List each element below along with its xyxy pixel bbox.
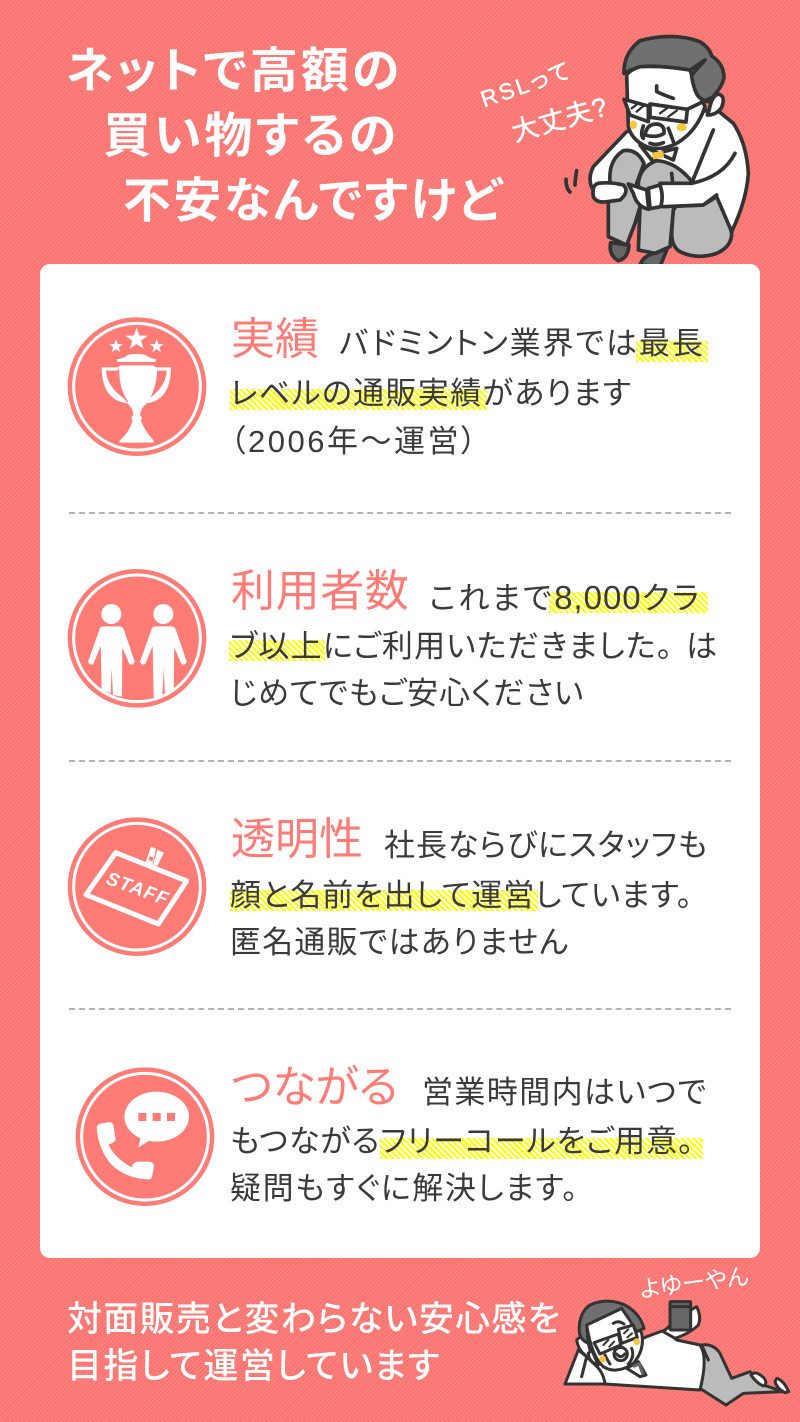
heading: 実績	[231, 315, 319, 364]
item: つながる: 疑問もすぐに解決します。	[230, 1171, 579, 1206]
item: 利用者数: ブ以上にご利用いただきました。は	[230, 629, 718, 664]
speech text: RSLって大丈夫?	[477, 56, 612, 147]
footer message: 対面販売と変わらない安心感を	[67, 1300, 561, 1339]
highlights	[636, 341, 708, 362]
item: 利用者数: じめてでもご安心ください	[230, 676, 584, 711]
icon: trophy	[68, 317, 206, 456]
body text: バドミントン業界では最長	[339, 326, 705, 361]
item: つながる	[76, 1063, 708, 1206]
illustration: worried man hugging knees	[477, 34, 750, 264]
item: 実績: レベルの通販実績があります	[230, 376, 632, 411]
dividers	[69, 512, 731, 514]
icon: staff badge	[68, 817, 206, 956]
title: 買い物するの	[103, 110, 399, 163]
item: 実績: （2006年～運営）	[230, 424, 479, 459]
highlights	[549, 592, 708, 613]
item: 透明性: 顔と名前を出して運営しています。	[230, 878, 693, 913]
speech text: RSLって大丈夫?: RSLって	[477, 56, 576, 112]
heading: つながる	[231, 1063, 398, 1112]
panel: white card	[40, 264, 760, 1258]
title: 不安なんですけど	[123, 175, 504, 228]
title	[66, 45, 504, 228]
item: つながる: もつながるフリーコールをご用意。	[230, 1124, 694, 1159]
body text: これまで8,000クラ	[429, 579, 701, 616]
heading: 透明性	[231, 815, 363, 864]
footer message	[67, 1300, 561, 1386]
highlight	[230, 890, 538, 911]
body text: 社長ならびにスタッフも	[384, 828, 708, 863]
icon: staff badge: STAFF	[104, 867, 172, 909]
speech text: よゆーやん: よゆーやん	[638, 1263, 750, 1302]
speech text: RSLって大丈夫?: 大丈夫?	[508, 91, 612, 147]
item: 透明性: 匿名通販ではありません	[230, 925, 569, 960]
title: ネットで高額の	[66, 45, 402, 98]
body text: 営業時間内はいつで	[422, 1075, 708, 1110]
illustration: relaxed man lying down with phone	[564, 1263, 790, 1406]
heading: 利用者数	[231, 567, 409, 616]
highlight	[380, 1138, 703, 1159]
icon: phone and speech bubble	[76, 1067, 214, 1206]
item: 透明性	[68, 815, 708, 960]
icon: two people	[68, 569, 206, 708]
item: 実績	[68, 315, 708, 459]
item: 利用者数	[68, 567, 718, 711]
footer message: 目指して運営しています	[67, 1347, 441, 1386]
